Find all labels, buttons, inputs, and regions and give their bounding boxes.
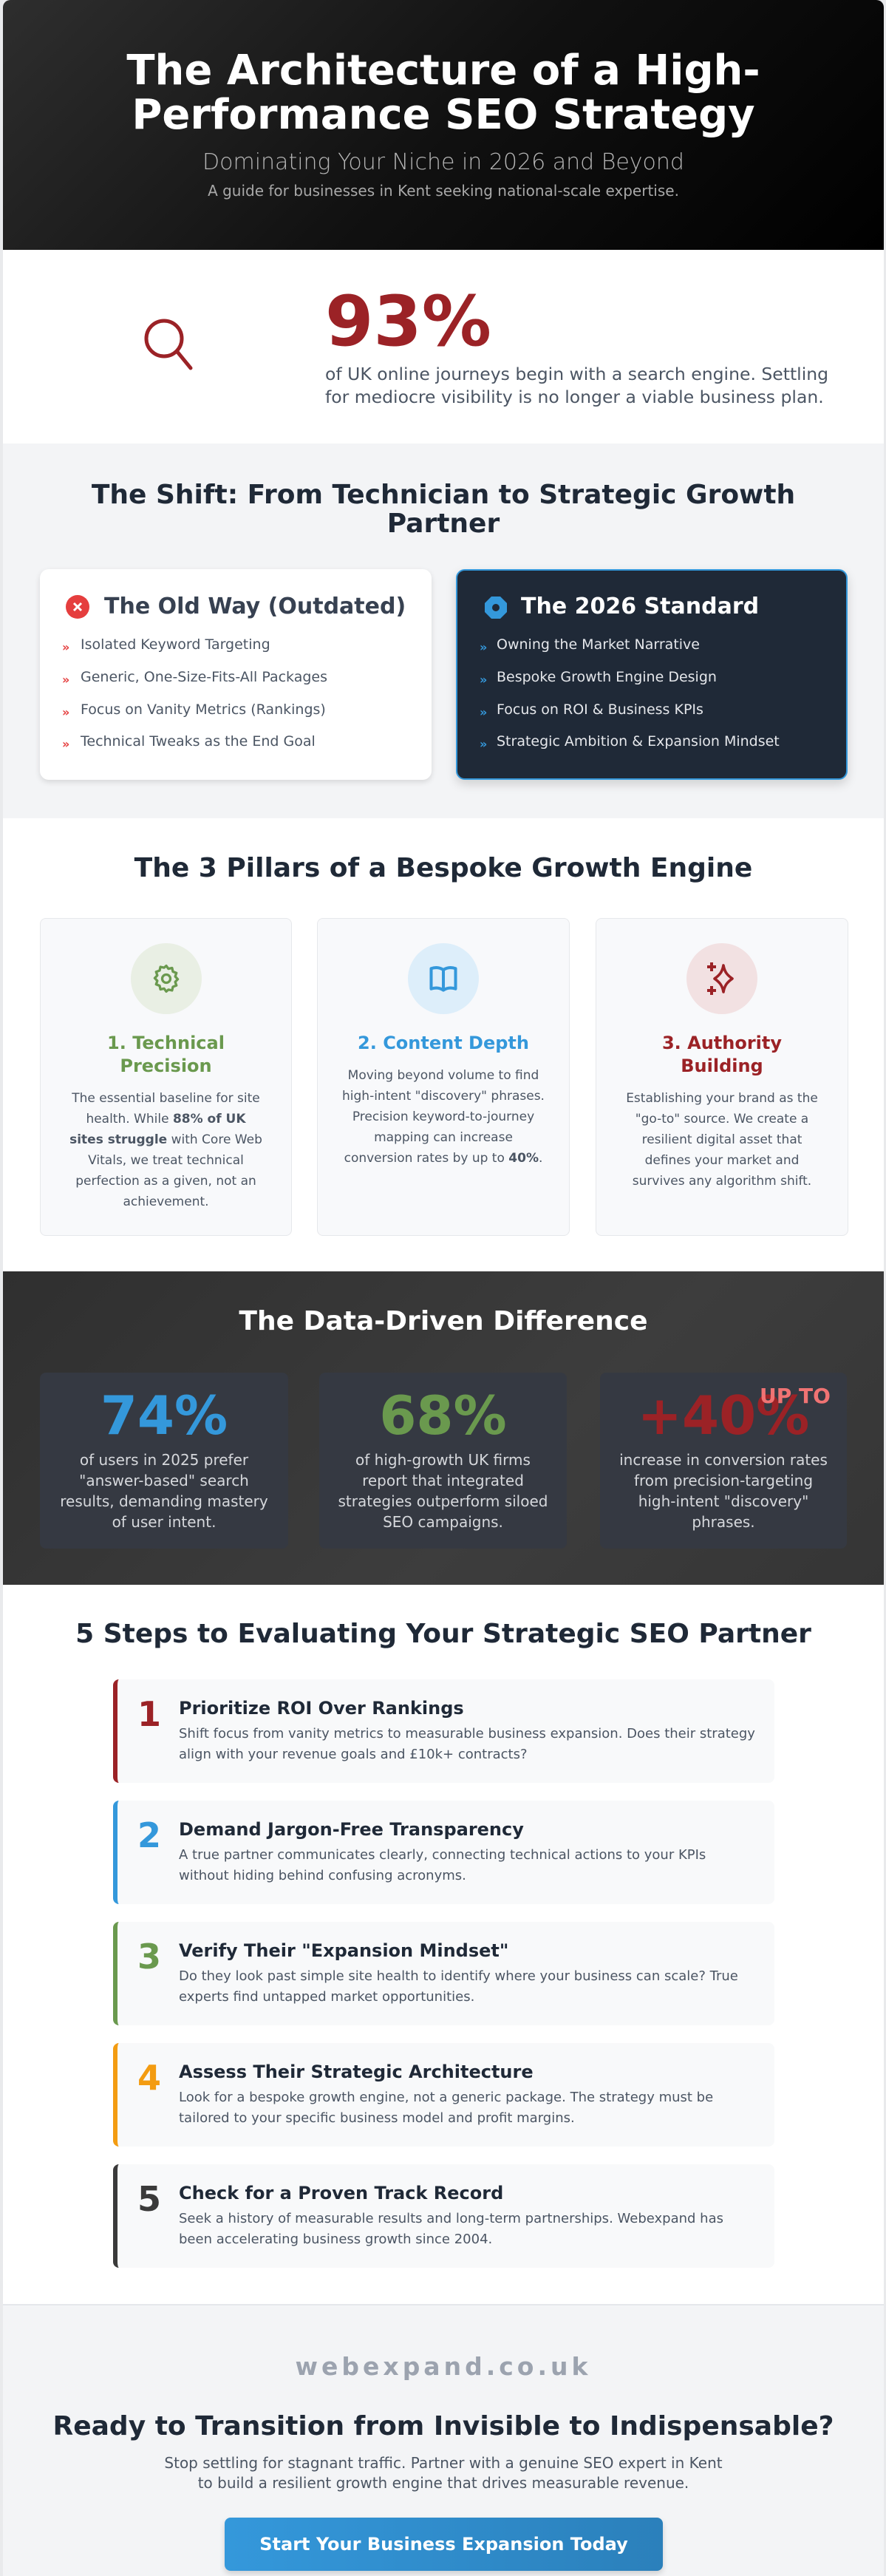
heading: The Shift: From Technician to Strategic Growth [92, 480, 795, 510]
pillar title: 2. Content Depth [358, 1033, 529, 1053]
step 3: 3 [137, 1937, 161, 1977]
list: » [62, 737, 69, 751]
pillar title [662, 1033, 782, 1076]
step 5: Seek a history of measurable results and long-term partnerships. Webexpand has [179, 2211, 723, 2226]
step 1: Shift focus from vanity metrics to measurable business expansion. Does their strategy [179, 1726, 755, 1741]
icon: sparkles [686, 943, 757, 1014]
title: The Architecture of a High- [126, 47, 760, 95]
pillar text: The essential baseline for site health. While 88% of UK [72, 1091, 260, 1126]
stat card 74 [40, 1373, 288, 1549]
step 2: A true partner communicates clearly, connecting technical actions to your KPIs [179, 1847, 706, 1863]
step 5: Check for a Proven Track Record [179, 2183, 503, 2203]
list: Isolated Keyword Targeting [81, 636, 270, 653]
card: 2026 standard [456, 569, 848, 780]
step 4: Look for a bespoke growth engine, not a generic package. The strategy must be [179, 2090, 713, 2105]
step 3: Do they look past simple site health to identify where your business can scale? True [179, 1968, 738, 1984]
list: Technical Tweaks as the End Goal [81, 733, 316, 750]
heading: The Data-Driven Difference [239, 1306, 648, 1336]
card: old way [40, 569, 432, 780]
stat card 74: of users in 2025 prefer "answer-based" search results, demanding mastery of user intent. [60, 1451, 268, 1531]
step 3: experts find untapped market opportunities. [179, 1989, 474, 2005]
step 5: 5 [137, 2179, 161, 2219]
stat card 40: +40% [638, 1384, 809, 1447]
list: » [62, 673, 69, 687]
pillar 3 [596, 918, 848, 1236]
icon: book [408, 943, 479, 1014]
step 3: Verify Their "Expansion Mindset" [179, 1940, 508, 1961]
step 4: 4 [137, 2058, 161, 2098]
header [3, 0, 884, 250]
heading [92, 480, 795, 539]
icon: badge [485, 597, 507, 619]
step 4: tailored to your specific business model and profit margins. [179, 2110, 575, 2126]
up to label: UP TO [760, 1384, 831, 1408]
pillar title: 3. Authority [662, 1033, 782, 1053]
stat card 40 [600, 1373, 847, 1549]
title [126, 47, 760, 139]
panel: 5 steps [3, 1585, 884, 2304]
button: Start Your Business Expansion Today [259, 2534, 628, 2555]
subtitle: Dominating Your Niche in 2026 and Beyond [202, 149, 684, 175]
icon: search [145, 319, 192, 370]
list [62, 636, 327, 751]
pillar 1 [40, 918, 292, 1236]
panel: data-driven difference [3, 1271, 884, 1585]
heading: The 3 Pillars of a Bespoke Growth Engine [134, 853, 752, 883]
step 1: 1 [137, 1694, 161, 1734]
step 2: without hiding behind confusing acronyms. [179, 1868, 466, 1883]
stat card 68 [319, 1373, 567, 1549]
button [225, 2518, 663, 2571]
step 2 [113, 1801, 774, 1904]
pillar title: 1. Technical [107, 1033, 225, 1053]
list: » [480, 705, 487, 719]
step 4 [113, 2043, 774, 2147]
big stat 93%: 93% [325, 282, 491, 362]
stat card 40: increase in conversion rates from precision-targeting high-intent "discovery" phrases. [619, 1451, 828, 1531]
pillar title: Precision [120, 1056, 212, 1076]
stat card 68: 68% [379, 1384, 507, 1447]
list: Focus on ROI & Business KPIs [497, 701, 703, 718]
stat section [3, 250, 884, 444]
list: » [480, 737, 487, 751]
stat text: for mediocre visibility is no longer a viable business plan. [325, 387, 824, 407]
step 5 [113, 2164, 774, 2268]
pillar title: Building [681, 1056, 763, 1076]
step 5: been accelerating business growth since 2004. [179, 2232, 492, 2247]
list: » [62, 705, 69, 719]
pillar text: Moving beyond volume to find high-intent "discovery" phrases. Precision keyword-to-journey mapping can increase conversion rates by up to 40%. [342, 1068, 545, 1166]
cta heading: Ready to Transition from Invisible to Indispensable? [53, 2411, 834, 2441]
heading: 5 Steps to Evaluating Your Strategic SEO Partner [75, 1619, 811, 1649]
title: Performance SEO Strategy [132, 91, 755, 139]
step 1 [113, 1679, 774, 1783]
pillar title [107, 1033, 225, 1076]
brand: webexpand.co.uk [296, 2352, 591, 2381]
stat text: of UK online journeys begin with a search engine. Settling [325, 364, 828, 384]
list: Strategic Ambition & Expansion Mindset [497, 733, 780, 750]
stat text [325, 364, 828, 407]
step 1: align with your revenue goals and £10k+ contracts? [179, 1747, 528, 1762]
step 4: Assess Their Strategic Architecture [179, 2062, 534, 2082]
list: » [480, 640, 487, 654]
cta text [164, 2454, 723, 2492]
heading: Partner [387, 509, 500, 539]
icon: x [66, 595, 89, 619]
tagline: A guide for businesses in Kent seeking national-scale expertise. [208, 182, 679, 200]
list: Bespoke Growth Engine Design [497, 669, 717, 685]
panel: the shift [3, 444, 884, 818]
step 1: Prioritize ROI Over Rankings [179, 1698, 464, 1719]
card heading: The Old Way (Outdated) [104, 594, 406, 619]
pillar text: sites struggle with Core Web Vitals, we treat technical perfection as a given, not an achievement. [69, 1132, 262, 1209]
pillar text [69, 1091, 262, 1209]
cta text: Stop settling for stagnant traffic. Partner with a genuine SEO expert in Kent [164, 2454, 723, 2472]
list: » [480, 673, 487, 687]
stat card 68: of high-growth UK firms report that integrated strategies outperform siloed SEO campaigns. [338, 1451, 548, 1531]
step 2: 2 [137, 1815, 161, 1855]
card heading: The 2026 Standard [521, 594, 759, 619]
step 2: Demand Jargon-Free Transparency [179, 1819, 524, 1840]
step 3 [113, 1922, 774, 2025]
panel: pillars [3, 818, 884, 1271]
list [480, 636, 780, 751]
list: Generic, One-Size-Fits-All Packages [81, 669, 327, 685]
icon: gear [130, 943, 201, 1014]
list: Owning the Market Narrative [497, 636, 700, 653]
pillar text: Establishing your brand as the "go-to" source. We create a resilient digital asset that defines your market and survives any algorithm shift. [626, 1091, 818, 1189]
cta text: to build a resilient growth engine that drives measurable revenue. [198, 2474, 689, 2492]
list: » [62, 640, 69, 654]
list: Focus on Vanity Metrics (Rankings) [81, 701, 326, 718]
panel: call to action [3, 2304, 884, 2576]
stat card 74: 74% [100, 1384, 228, 1447]
pillar 2 [317, 918, 570, 1236]
